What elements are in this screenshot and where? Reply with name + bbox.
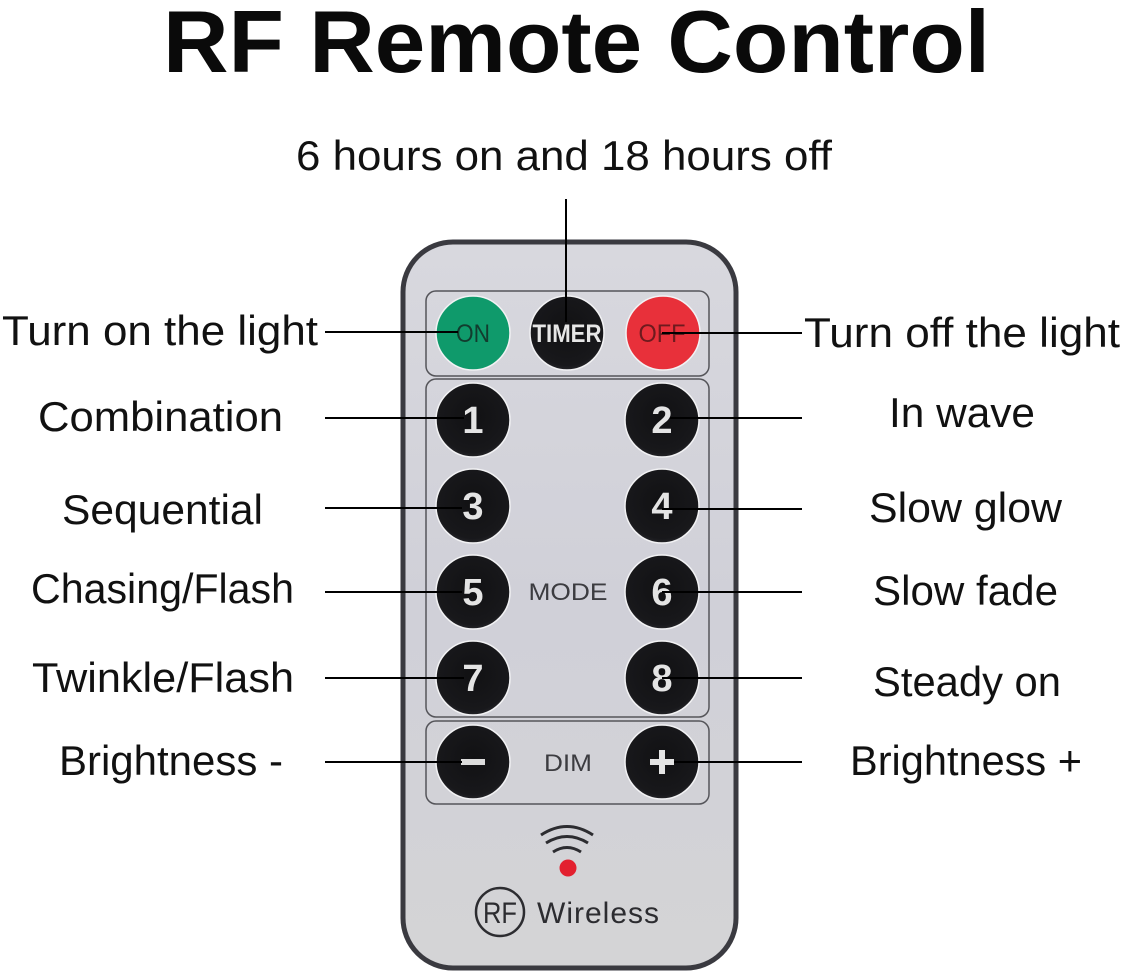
timer label: 6 hours on and 18 hours off (296, 132, 832, 179)
off button (626, 296, 700, 370)
on button (436, 296, 510, 370)
timer button (530, 296, 604, 370)
left labels: Brightness - (59, 737, 283, 784)
right labels: Steady on (873, 658, 1061, 705)
button 5 (436, 555, 510, 629)
remote body (403, 242, 736, 968)
left labels: Combination (38, 393, 283, 440)
button 4 (625, 469, 699, 543)
button 3 (436, 469, 510, 543)
dim label: DIM (544, 750, 592, 777)
right labels: Slow fade (873, 567, 1058, 614)
right labels: In wave (889, 389, 1035, 436)
button 4: 4 (651, 486, 673, 528)
rf wireless logo (476, 888, 659, 936)
mode label: MODE (528, 579, 608, 606)
power button group (426, 291, 709, 376)
icon: wireless signal (541, 826, 593, 876)
right labels: Brightness + (850, 737, 1082, 784)
button 2: 2 (651, 400, 673, 442)
on button: ON (456, 320, 490, 348)
rf wireless logo: Wireless (537, 897, 659, 930)
rf wireless logo: RF (483, 897, 517, 930)
button 3: 3 (462, 486, 484, 528)
right labels (804, 309, 1120, 784)
button 1: 1 (462, 400, 484, 442)
button 5: 5 (462, 572, 484, 614)
button 6 (625, 555, 699, 629)
off button: OFF (638, 320, 686, 348)
minus button (436, 725, 510, 799)
button 7: 7 (462, 658, 484, 700)
button 8 (625, 641, 699, 715)
button 6: 6 (651, 572, 673, 614)
left labels: Chasing/Flash (31, 565, 294, 612)
left labels: Turn on the light (2, 307, 318, 354)
right labels: Slow glow (869, 484, 1063, 531)
button 7 (436, 641, 510, 715)
remote control (403, 242, 736, 968)
left labels: Sequential (62, 486, 263, 533)
timer button: TIMER (532, 320, 602, 348)
button 1 (436, 383, 510, 457)
right labels: Turn off the light (804, 309, 1120, 356)
left labels (2, 307, 318, 784)
plus button (625, 725, 699, 799)
button 8: 8 (651, 658, 673, 700)
leader lines (325, 199, 802, 762)
dim button group (426, 721, 709, 804)
mode button group (426, 379, 709, 717)
button 2 (625, 383, 699, 457)
left labels: Twinkle/Flash (32, 654, 294, 701)
